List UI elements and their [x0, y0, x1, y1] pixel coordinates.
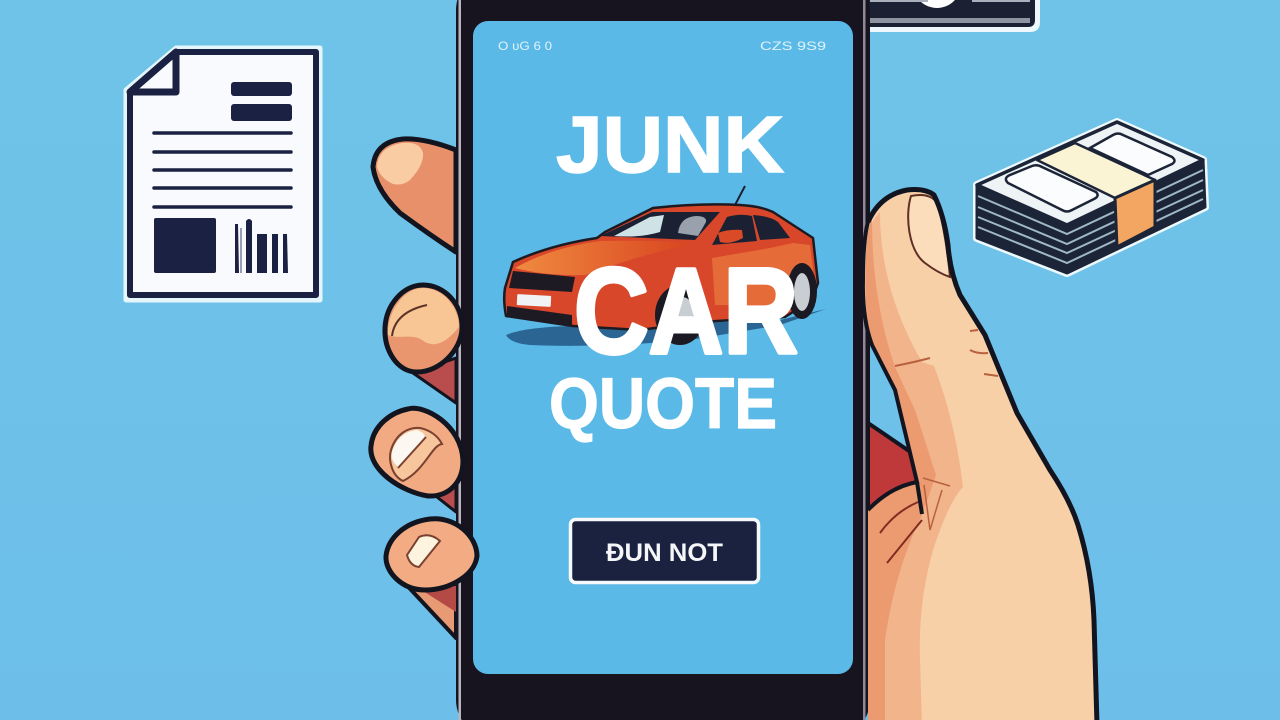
- car body: [504, 204, 818, 330]
- heading: CAR: CAR: [574, 243, 798, 379]
- car windshield: [600, 212, 720, 240]
- car lower bumper: [507, 306, 572, 326]
- status bar left: O ᴜG 6 0: [498, 39, 552, 53]
- finger 3: [371, 408, 463, 496]
- finger 2: [385, 285, 462, 372]
- heading: QUOTE: QUOTE: [549, 365, 777, 444]
- finger 4: [386, 519, 477, 590]
- icon: document: [126, 48, 320, 300]
- status bar right: CZS 9S9: [760, 39, 826, 53]
- phone: [456, 0, 870, 720]
- car hood: [515, 241, 695, 275]
- car antenna: [735, 186, 745, 205]
- thumb and palm: [863, 190, 1097, 720]
- icon: stack of money: [977, 122, 1205, 273]
- icon: partial card behind phone: [860, 0, 1040, 32]
- red car: [504, 186, 826, 346]
- car grille: [509, 271, 575, 292]
- car side windows: [712, 215, 757, 245]
- car licence plate: [517, 294, 551, 307]
- hand webbing behind phone: [400, 358, 920, 638]
- button: [570, 520, 758, 582]
- heading: JUNK: JUNK: [556, 100, 784, 189]
- phone body: [456, 0, 870, 720]
- car front wheel: [655, 285, 705, 345]
- car shadow: [506, 309, 826, 346]
- car mirror: [718, 230, 743, 243]
- car rear wheel: [787, 263, 817, 319]
- phone screen: [473, 21, 853, 674]
- finger 1: [373, 139, 456, 252]
- button: ĐUN NOT: [606, 539, 723, 567]
- thumb shadow: [865, 212, 963, 720]
- car door highlights: [712, 243, 815, 305]
- thumbnail: [908, 195, 950, 277]
